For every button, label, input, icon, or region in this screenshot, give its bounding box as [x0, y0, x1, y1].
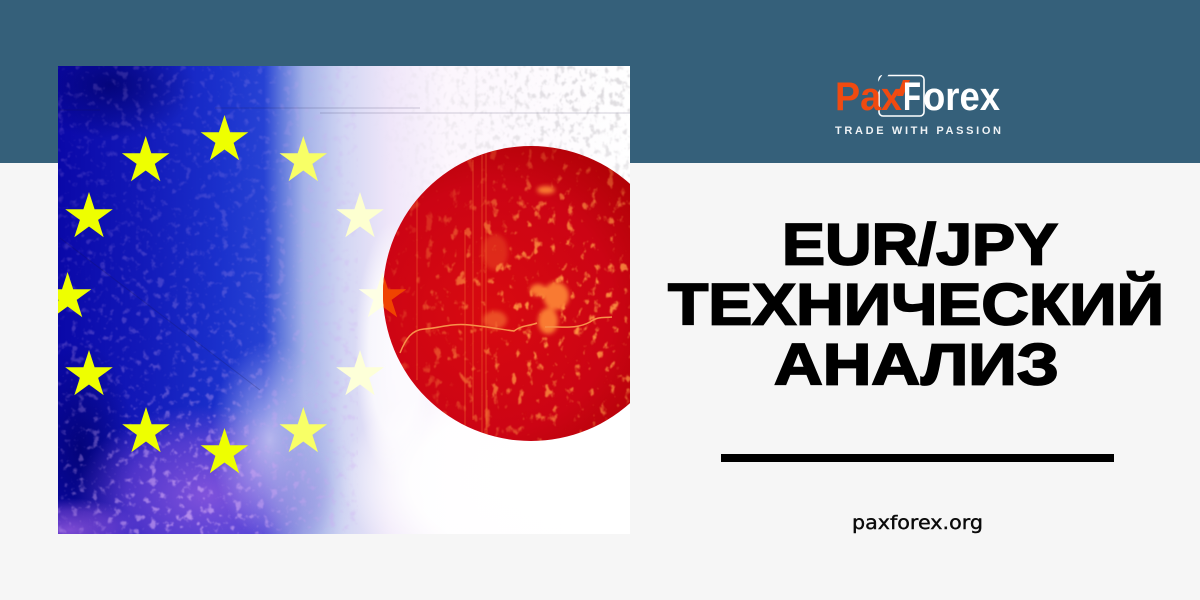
header band	[0, 0, 1200, 163]
icon: EU star ring	[44, 115, 406, 473]
logo: PaxForex: F	[903, 75, 921, 119]
title: АНАЛИЗ	[774, 332, 1059, 398]
panel: EU and Japan flag image	[58, 66, 630, 534]
logo: PaxForex	[835, 72, 1001, 137]
title: EUR/JPY	[782, 212, 1058, 278]
logo tagline: TRADE WITH PASSION	[835, 125, 1001, 137]
title	[668, 212, 1164, 398]
logo: PaxForex: Pax	[835, 75, 902, 119]
title: ТЕХНИЧЕСКИЙ	[668, 272, 1164, 338]
website url: paxforex.org	[852, 512, 983, 534]
icon: Japan red sun disc	[383, 146, 630, 441]
logo: PaxForex: orex	[923, 75, 1000, 119]
divider bar	[721, 454, 1114, 462]
